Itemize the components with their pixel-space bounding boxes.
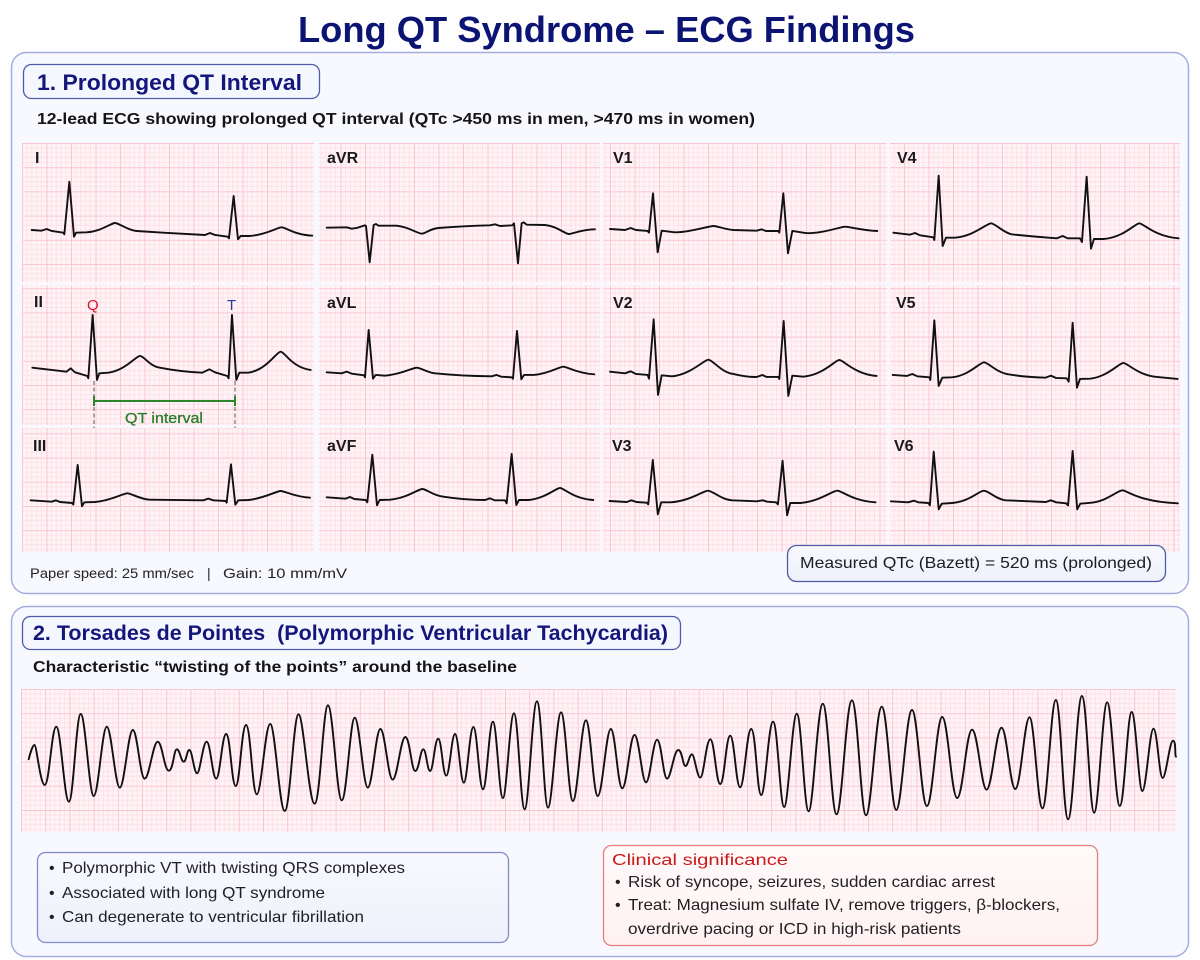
text box: clinical significance: • — [615, 874, 621, 891]
title: Long QT Syndrome – ECG Findings — [298, 9, 915, 50]
ECG lead V3 — [603, 428, 887, 552]
subheading: 12-lead description: 12-lead ECG showing prolonged QT interval (QTc >450 ms in men, >470 ms in women) — [37, 111, 755, 128]
ECG lead V2 — [603, 285, 887, 425]
ECG lead I: I — [35, 150, 39, 167]
subheading: twisting of the points: Characteristic “twisting of the points” around the baseline — [33, 659, 517, 676]
callout: measured QTc — [788, 546, 1166, 582]
text box: torsades features: Can degenerate to ventricular fibrillation — [62, 909, 364, 926]
text box: torsades features: • — [49, 909, 55, 926]
ECG lead III — [22, 428, 314, 552]
ECG lead aVR — [319, 143, 600, 282]
text box: torsades features — [38, 852, 508, 942]
heading: section 2 — [22, 616, 680, 650]
ECG lead aVL — [319, 285, 600, 425]
T marker: T — [227, 297, 236, 314]
text box: clinical significance: overdrive pacing or ICD in high-risk patients — [628, 921, 961, 938]
text box: clinical significance: Clinical significance — [612, 852, 788, 869]
text box: clinical significance: • — [615, 897, 621, 914]
Q marker: Q — [87, 297, 99, 314]
chart: torsades rhythm strip — [21, 689, 1176, 832]
text box: clinical significance — [604, 846, 1098, 946]
ECG lead aVF — [319, 428, 600, 552]
callout: measured QTc: Measured QTc (Bazett) = 520 ms (prolonged) — [800, 555, 1152, 572]
ECG lead V6: V6 — [894, 438, 914, 455]
ECG lead V4 — [890, 143, 1180, 282]
ECG lead V3: V3 — [612, 438, 632, 455]
ECG lead aVL: aVL — [327, 295, 357, 312]
caption: paper speed and gain: | — [207, 565, 211, 581]
ECG lead V6 — [890, 428, 1180, 552]
ECG lead III: III — [33, 438, 46, 455]
ECG lead V2: V2 — [613, 295, 633, 312]
caption: paper speed and gain: Paper speed: 25 mm/sec — [30, 565, 194, 581]
text box: torsades features: Associated with long QT syndrome — [62, 885, 325, 902]
heading: section 1: 1. Prolonged QT Interval — [37, 70, 302, 95]
panel: prolonged QT interval — [12, 52, 1188, 594]
ECG lead aVF: aVF — [327, 438, 357, 455]
text box: torsades features: Polymorphic VT with twisting QRS complexes — [62, 860, 405, 877]
ECG lead V4: V4 — [897, 150, 917, 167]
caption: paper speed and gain: Gain: 10 mm/mV — [223, 565, 348, 581]
text box: clinical significance: Risk of syncope, seizures, sudden cardiac arrest — [628, 874, 996, 891]
ECG lead I — [22, 143, 314, 282]
QT interval bracket: QT interval — [125, 411, 203, 427]
ECG lead II with QT annotation: II — [34, 294, 43, 311]
panel: torsades de pointes — [12, 606, 1188, 956]
text box: torsades features: • — [49, 885, 55, 902]
heading: section 1 — [24, 64, 320, 98]
text box: clinical significance: Treat: Magnesium sulfate IV, remove triggers, β-blockers, — [628, 897, 1060, 914]
text box: torsades features: • — [49, 860, 55, 877]
ECG lead V5: V5 — [896, 295, 916, 312]
ECG lead V5 — [890, 285, 1180, 425]
heading: section 2: 2. Torsades de Pointes (Polymorphic Ventricular Tachycardia) — [33, 622, 668, 645]
ECG lead V1 — [603, 143, 887, 282]
ECG lead aVR: aVR — [327, 150, 359, 167]
ECG lead II with QT annotation — [22, 285, 314, 430]
QT interval bracket — [94, 381, 235, 430]
ECG lead V1: V1 — [613, 150, 633, 167]
